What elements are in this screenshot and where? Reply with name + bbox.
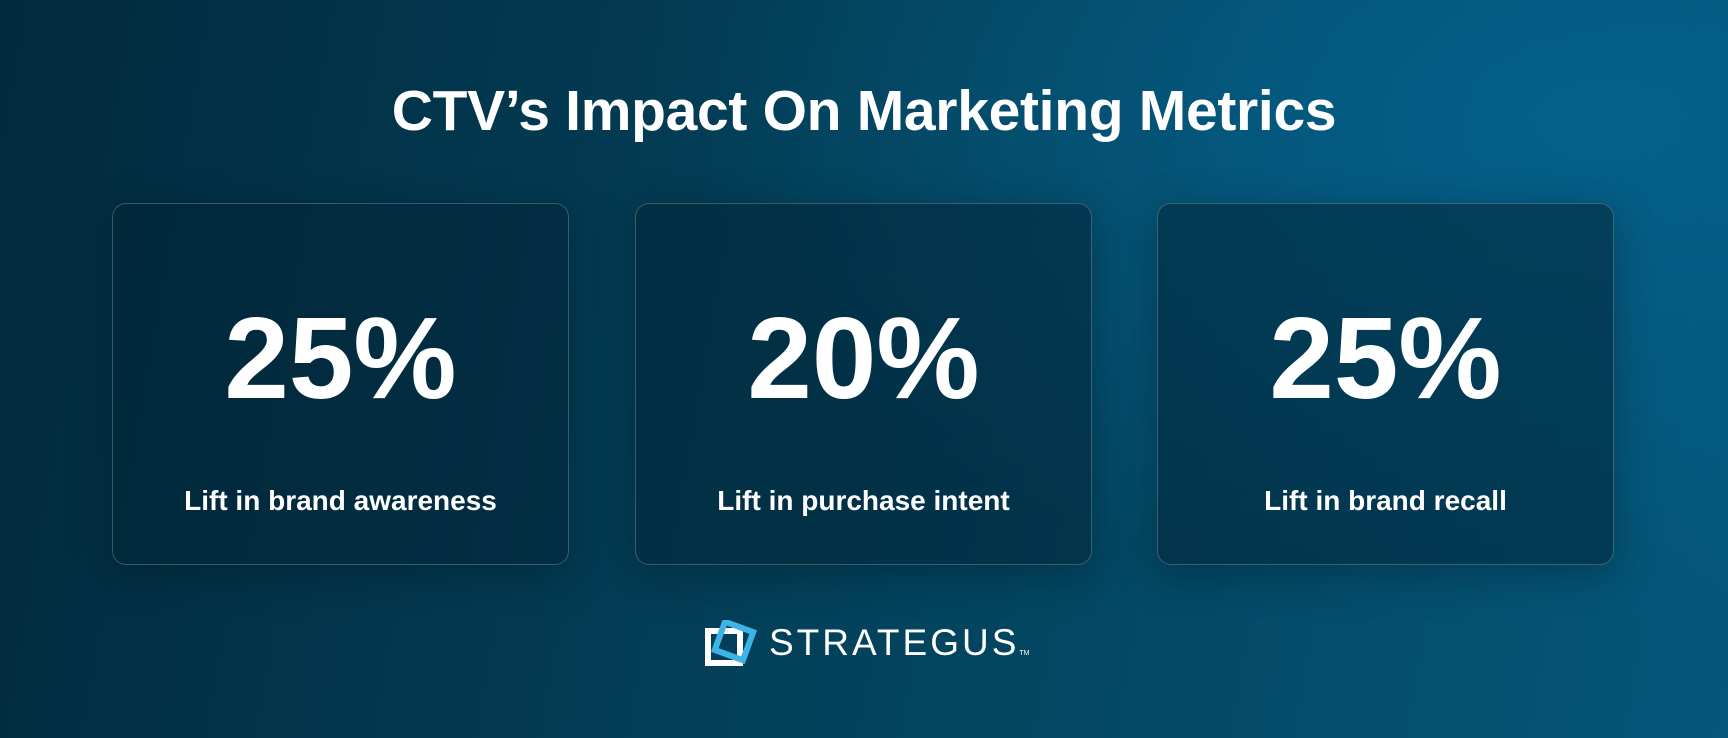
- logo text: STRATEGUSTM: [769, 622, 1030, 663]
- icon: logo squares: [705, 620, 757, 666]
- label: purchase intent: Lift in purchase intent: [717, 485, 1010, 516]
- label: awareness: Lift in brand awareness: [184, 485, 497, 516]
- label: recall: Lift in brand recall: [1264, 485, 1507, 516]
- panel: brand recall: [1157, 203, 1614, 565]
- stat: 25% recall: 25%: [1269, 293, 1502, 423]
- logo: Strategus: [705, 620, 1030, 666]
- stat: 20% purchase intent: 20%: [747, 293, 980, 423]
- panel: brand awareness: [112, 203, 569, 565]
- stat: 25% awareness: 25%: [224, 293, 457, 423]
- panel: purchase intent: [635, 203, 1092, 565]
- title: CTV’s Impact On Marketing Metrics: [392, 79, 1336, 143]
